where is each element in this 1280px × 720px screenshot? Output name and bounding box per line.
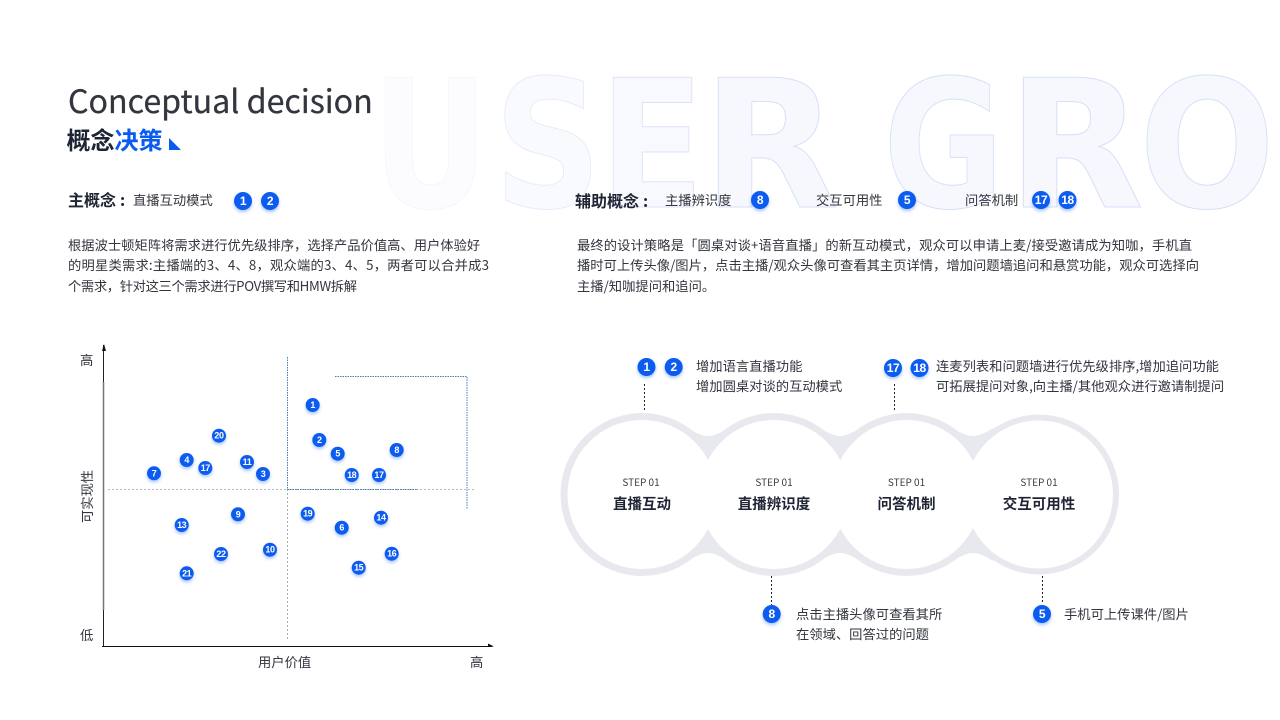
badges 17 18 [1032, 191, 1076, 209]
step 1: 直播互动 [613, 493, 671, 514]
data points: 9 [236, 509, 241, 519]
callout: 1 2: 增加圆桌对谈的互动模式 [696, 376, 842, 395]
data points: 5 [335, 449, 340, 459]
auxiliary concept row: 问答机制 [965, 190, 1018, 209]
main concept text: 的明星类需求:主播端的3、4、8，观众端的3、4、5，两者可以合并成3 [68, 255, 489, 274]
main concept text [68, 235, 489, 295]
step 4: 交互可用性 [1003, 493, 1075, 514]
auxiliary concept row: 辅助概念: [575, 188, 648, 212]
data points: 1 [310, 400, 315, 410]
data points: 14 [376, 513, 386, 523]
callout: 8 [763, 604, 942, 643]
auxiliary concept row: 交互可用性 [816, 190, 882, 209]
callout: 17 18: 可拓展提问对象,向主播/其他观众进行邀请制提问 [936, 376, 1224, 395]
step 2: 直播辨识度 [738, 493, 811, 514]
chart: priority matrix [77, 344, 494, 671]
data points: 3 [261, 469, 266, 479]
icon: corner triangle [169, 138, 181, 150]
data points: 6 [339, 523, 344, 533]
data points [147, 398, 404, 580]
step 3 [878, 474, 936, 514]
main concept row [68, 187, 279, 211]
data points: 10 [265, 545, 275, 555]
data points: 7 [152, 468, 157, 478]
auxiliary concept row [575, 188, 1076, 212]
badge 8 [751, 191, 769, 209]
subtitle: 概念决策 [66, 121, 162, 156]
axis labels [77, 350, 483, 671]
badges 1 2 [234, 192, 279, 210]
watermark: USER GRO: S [494, 41, 602, 249]
data points: 17 [201, 463, 210, 473]
watermark: USER GRO [372, 41, 1275, 250]
callout: 17 18: 连麦列表和问题墙进行优先级排序,增加追问功能 [936, 356, 1219, 375]
step 4: STEP 01 [1020, 474, 1058, 489]
axis labels: 可实现性 [77, 470, 96, 523]
auxiliary concept text: 最终的设计策略是「圆桌对谈+语音直播」的新互动模式，观众可以申请上麦/接受邀请成为知咖，手机直 [577, 235, 1192, 254]
watermark: USER GRO: O [1139, 42, 1275, 249]
axis labels: 高 [80, 350, 93, 369]
main concept text: 个需求，针对这三个需求进行POV撰写和HMW拆解 [68, 276, 357, 295]
step 1: STEP 01 [622, 474, 660, 489]
callout: 17 18: 18 [913, 361, 926, 375]
step 4 [1003, 474, 1075, 514]
badges 1 2: 2 [267, 194, 274, 208]
data points: 13 [177, 520, 187, 530]
badges 17 18: 18 [1061, 193, 1074, 207]
axis labels: 用户价值 [258, 652, 311, 671]
main concept row: 主概念: [68, 187, 125, 211]
main concept text: 根据波士顿矩阵将需求进行优先级排序，选择产品价值高、用户体验好 [68, 235, 480, 254]
data points: 15 [354, 563, 364, 573]
step 3: STEP 01 [888, 474, 925, 489]
auxiliary concept text: 主播/知咖提问和追问。 [577, 276, 715, 295]
axis labels: 高 [470, 652, 483, 671]
step 2 [738, 474, 811, 514]
auxiliary concept text: 播时可上传头像/图片，点击主播/观众头像可查看其主页详情，增加问题墙追问和悬赏功能，观众可选择向 [577, 255, 1199, 274]
callout: 5: 5 [1039, 607, 1046, 621]
callout: 1 2: 2 [671, 360, 678, 374]
watermark: USER GRO: R [702, 42, 839, 249]
data points: 11 [243, 457, 252, 467]
badge 5: 5 [904, 193, 911, 207]
axis labels: 低 [80, 625, 93, 644]
badge 5 [898, 191, 916, 209]
watermark: USER GRO: G [883, 42, 1004, 249]
badge 8: 8 [757, 193, 764, 207]
main concept row: 直播互动模式 [133, 190, 213, 209]
watermark: USER GRO: E [599, 43, 705, 250]
step 1 [613, 474, 671, 514]
data points: 22 [216, 549, 226, 559]
step 3: 问答机制 [878, 493, 936, 514]
data points: 4 [184, 455, 189, 465]
data points: 16 [387, 549, 397, 559]
callout: 1 2: 增加语言直播功能 [696, 356, 802, 375]
callout: 17 18 [884, 356, 1224, 395]
callout: 1 2: 1 [643, 360, 650, 374]
data points: 19 [303, 509, 313, 519]
callout: 1 2 [638, 356, 842, 395]
callout: 8: 在领域、回答过的问题 [796, 624, 929, 643]
data points: 17 [374, 470, 384, 480]
connectors [644, 384, 1042, 605]
watermark: USER GRO: R [1007, 42, 1144, 249]
callout: 8: 8 [769, 607, 776, 621]
data points: 18 [347, 470, 357, 480]
step 2: STEP 01 [755, 474, 793, 489]
data points: 20 [214, 431, 224, 441]
badges 1 2: 1 [240, 194, 247, 208]
callout: 5: 手机可上传课件/图片 [1064, 604, 1189, 623]
auxiliary concept row: 主播辨识度 [665, 190, 731, 209]
ring diagram [560, 413, 1119, 576]
auxiliary concept text [577, 235, 1199, 295]
badges 17 18: 17 [1035, 193, 1048, 207]
watermark: USER GRO: U [372, 43, 489, 250]
callout: 17 18: 17 [887, 361, 900, 375]
data points: 8 [394, 445, 399, 455]
title: Conceptual decision [68, 77, 373, 123]
data points: 2 [317, 435, 322, 445]
data points: 21 [182, 568, 192, 578]
callout: 8: 点击主播头像可查看其所 [796, 604, 942, 623]
